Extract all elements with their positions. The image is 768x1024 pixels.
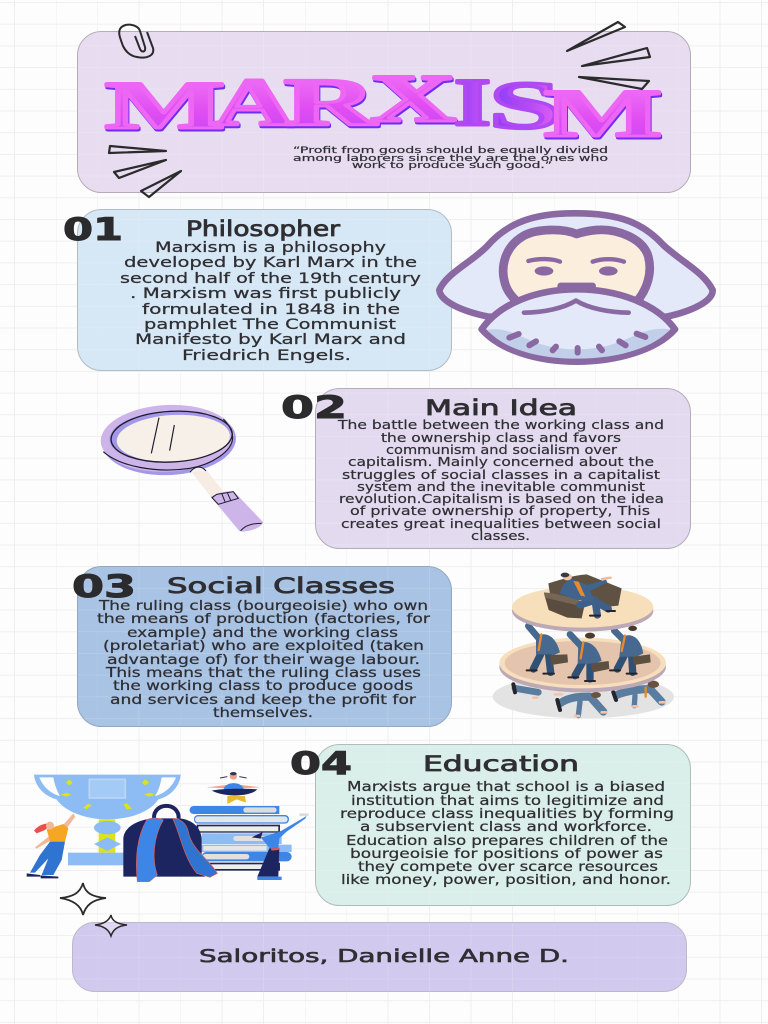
meditating figure: [207, 772, 261, 804]
body text: Manifesto by Karl Marx and: [135, 332, 406, 348]
body text: revolution.Capitalism is based on the idea: [339, 491, 664, 506]
body text: reproduce class inequalities by forming: [340, 806, 674, 822]
title: MARXISM: M: [545, 77, 663, 153]
body text: struggles of social classes in a capitalist: [342, 467, 660, 482]
body text: [340, 779, 674, 888]
icon: sparkle small: [95, 915, 127, 936]
body text: This means that the ruling class uses: [105, 665, 421, 681]
title: MARXISM: X: [371, 62, 457, 138]
body text: Marxism is a philosophy: [155, 240, 387, 256]
panel: social classes: [72, 566, 452, 726]
number 04: 04: [290, 746, 352, 782]
student figure: [27, 813, 75, 878]
icon: class pyramid illustration: [493, 573, 674, 718]
quote: [293, 146, 609, 171]
title: MARXISM: A: [215, 66, 295, 142]
number 03: 03: [72, 569, 136, 605]
body text: capitalism. Mainly concerned about the: [348, 454, 654, 469]
panel: education: [290, 744, 690, 906]
books: [190, 806, 292, 871]
quote: among laborers since they are the ones who: [293, 154, 609, 164]
icon: education illustration: [27, 772, 309, 882]
heading: Social Classes: Social Classes: [167, 574, 395, 598]
heading: Philosopher: Philosopher: [186, 217, 340, 241]
body text: they compete over scarce resources: [358, 859, 658, 875]
title: MARXISM: X: [370, 60, 456, 136]
body text: the means of production (factories, for: [97, 611, 431, 627]
trophy: [34, 775, 181, 865]
icon: Karl Marx face: [439, 213, 713, 362]
icon: top right burst: [567, 22, 650, 89]
body text: example) and the working class: [127, 625, 398, 641]
icon: bottom left burst: [109, 146, 181, 197]
number 01: 01: [63, 212, 123, 248]
heading: Education: Education: [423, 752, 579, 776]
lower disc: [499, 642, 666, 692]
quote: “Profit from goods should be equally divided: [293, 146, 608, 156]
body text: institution that aims to legitimize and: [351, 793, 664, 809]
title: MARXISM: R: [284, 64, 378, 140]
body text: Marxists argue that school is a biased: [347, 779, 665, 795]
title: MARXISM: M: [106, 69, 226, 145]
body text: like money, power, position, and honor.: [341, 872, 671, 888]
body text: second half of the 19th century: [120, 271, 422, 287]
body text: . Marxism was first publicly: [130, 286, 402, 302]
body text: system and the inevitable communist: [357, 479, 645, 494]
body text: (proletariat) who are exploited (taken: [103, 638, 424, 654]
icon: sparkle large: [60, 883, 106, 915]
panel: title banner: [78, 32, 690, 192]
body text: themselves.: [213, 705, 313, 721]
body text: a subservient class and workforce.: [360, 819, 652, 835]
title: MARXISM: M: [105, 67, 225, 143]
title: MARXISM: I: [454, 64, 491, 140]
standing worker right: [610, 626, 651, 674]
quote: work to produce such good.”: [352, 161, 552, 171]
panel: main idea: [281, 388, 690, 548]
body text: Education also prepares children of the: [346, 833, 668, 849]
body text: bourgeoisie for positions of power as: [350, 846, 663, 862]
body text: communism and socialism over: [386, 442, 618, 457]
body text: The ruling class (bourgeoisie) who own: [98, 598, 428, 614]
body text: developed by Karl Marx in the: [124, 255, 417, 271]
body text: [337, 417, 664, 543]
standing worker left: [527, 626, 568, 674]
body text: formulated in 1848 in the: [142, 302, 400, 318]
boss on sofa: [544, 573, 622, 618]
body text: The battle between the working class and: [337, 417, 664, 432]
icon: magnifying glass: [99, 402, 263, 531]
body text: of private ownership of property, This: [350, 503, 650, 518]
bottom crawling workers: [513, 681, 665, 716]
backpack: [123, 806, 217, 882]
panel: author footer: [72, 922, 686, 992]
panel: philosopher: [63, 210, 452, 370]
title: MARXISM: A: [214, 64, 294, 140]
body text: advantage of) for their wage labour.: [107, 652, 420, 668]
body text: [97, 598, 431, 721]
body text: classes.: [471, 528, 530, 543]
title: MARXISM: R: [285, 66, 379, 142]
body text: and services and keep the profit for: [110, 692, 417, 708]
standing worker middle: [568, 633, 609, 681]
body text: pamphlet The Communist: [144, 317, 396, 333]
title: MARXISM: M: [544, 75, 662, 151]
author name: Saloritos, Danielle Anne D.: [199, 946, 569, 967]
icon: paperclip: [119, 25, 153, 58]
heading: Main Idea: Main Idea: [425, 396, 577, 420]
body text: the ownership class and favors: [381, 430, 621, 445]
title: MARXISM: [105, 60, 663, 153]
body text: the working class to produce goods: [113, 678, 413, 694]
number 02: 02: [281, 390, 347, 426]
body text: creates great inequalities between social: [341, 516, 661, 531]
teacher figure: [252, 813, 309, 880]
body text: Friedrich Engels.: [182, 348, 351, 364]
title: MARXISM: S: [489, 67, 561, 143]
body text: [120, 240, 422, 364]
upper disc: [512, 590, 653, 632]
